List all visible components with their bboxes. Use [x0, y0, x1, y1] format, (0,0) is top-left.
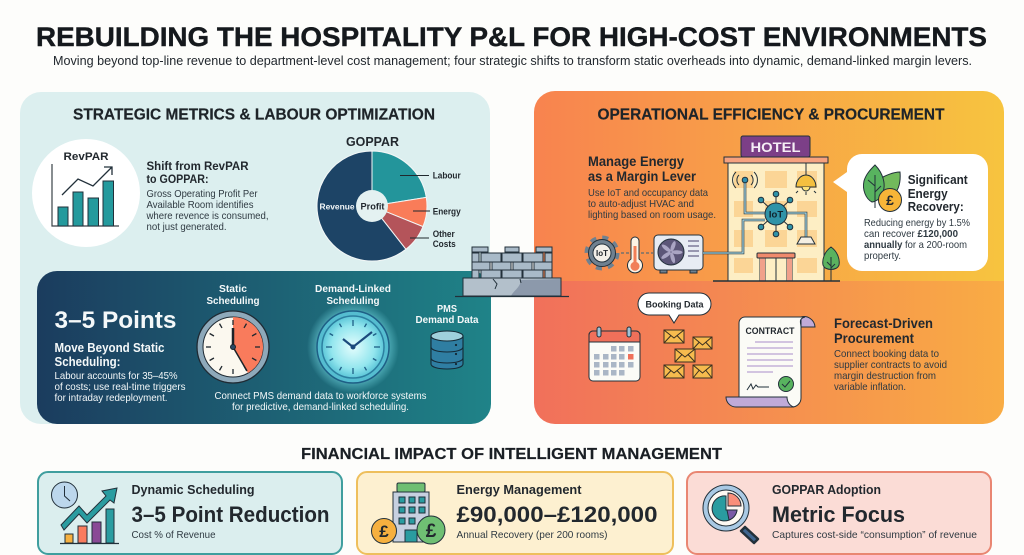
text block: move beyond static scheduling	[54, 341, 186, 404]
panel heading: operational efficiency: OPERATIONAL EFFICIENCY & PROCUREMENT	[598, 106, 945, 124]
text block: manage energy: Manage Energy	[588, 153, 684, 169]
icon: tree	[823, 247, 839, 281]
text block: move beyond static scheduling: Move Beyond Static	[54, 341, 165, 355]
text block: forecast-driven procurement: variable inflation.	[834, 382, 906, 393]
icon: envelopes	[664, 330, 712, 378]
icon: RevPAR bar chart: RevPAR	[64, 151, 109, 163]
label: demand-linked scheduling: Demand-Linked	[315, 283, 391, 295]
chart: GOPPAR pie: Energy	[433, 206, 461, 216]
chart: GOPPAR pie	[317, 134, 461, 261]
callout: significant energy recovery: can recover £120,000	[864, 229, 958, 240]
text block: shift from RevPAR to GOPPAR: to GOPPAR:	[146, 172, 208, 186]
caption: connect PMS data: for predictive, demand-linked scheduling.	[232, 402, 409, 413]
callout: significant energy recovery: Energy	[908, 187, 948, 201]
card: GOPPAR adoption: Metric Focus	[772, 502, 905, 527]
text block: shift from RevPAR to GOPPAR: Available Room identifies	[146, 200, 254, 211]
icon: brick wall	[455, 247, 569, 296]
panel: operational efficiency and procurement	[534, 91, 1004, 424]
icon: RevPAR bar chart	[32, 139, 140, 247]
text block: manage energy: lighting based on room usage.	[588, 210, 716, 221]
icon: contract scroll: CONTRACT	[746, 326, 795, 336]
text block: shift from RevPAR to GOPPAR	[146, 159, 268, 233]
callout: booking data: Booking Data	[646, 300, 704, 310]
text block: forecast-driven procurement: Connect booking data to	[834, 349, 939, 360]
text block: forecast-driven procurement: supplier contracts to avoid	[834, 360, 947, 371]
icon: magnifier with pie	[703, 485, 758, 543]
text block: manage energy: as a Margin Lever	[588, 168, 696, 184]
icon: hotel building with IoT network: HOTEL	[750, 139, 801, 155]
title: REBUILDING THE HOSPITALITY P&L FOR HIGH-COST ENVIRONMENTS	[36, 22, 987, 52]
callout: significant energy recovery: annually for a 200-room	[864, 240, 967, 251]
icon: database	[431, 331, 463, 369]
icon: IoT gear: IoT	[596, 249, 608, 258]
chart: GOPPAR pie: Profit	[360, 202, 385, 212]
text block: forecast-driven procurement: margin destruction from	[834, 371, 936, 382]
card: energy management	[357, 472, 673, 554]
label: demand-linked scheduling	[315, 283, 391, 307]
text block: shift from RevPAR to GOPPAR: not just generated.	[146, 222, 226, 233]
panel heading: strategic metrics: STRATEGIC METRICS & LABOUR OPTIMIZATION	[73, 106, 435, 124]
icon: static clock	[197, 311, 269, 383]
big stat: 3–5 points: 3–5 Points	[54, 307, 176, 334]
icon: clock and rising chart	[52, 482, 119, 544]
label: static scheduling	[206, 283, 260, 307]
icon: wifi sensor	[733, 172, 757, 188]
callout: booking data	[638, 293, 711, 323]
card: GOPPAR adoption	[687, 472, 991, 554]
label: PMS demand data: Demand Data	[416, 314, 479, 326]
card: dynamic scheduling: Cost % of Revenue	[132, 530, 216, 541]
panel: strategic metrics and labour optimization	[20, 92, 491, 424]
icon: IoT wiring	[703, 181, 806, 253]
heading: financial impact: FINANCIAL IMPACT OF INTELLIGENT MANAGEMENT	[301, 446, 723, 463]
icon: calendar	[589, 327, 640, 381]
label: static scheduling: Static	[219, 283, 247, 295]
subtitle: Moving beyond top-line revenue to department-level cost management; four strategic shifts to transform static overheads into dynamic, demand-linked margin levers.	[53, 54, 972, 68]
callout: significant energy recovery	[833, 154, 988, 271]
text block: move beyond static scheduling: of costs; use real-time triggers	[54, 382, 186, 393]
icon: leaves with pound coin: £	[886, 192, 894, 208]
panel: labour scheduling	[37, 271, 491, 424]
text block: manage energy: to auto-adjust HVAC and	[588, 199, 694, 210]
chart: GOPPAR pie: Revenue	[320, 202, 355, 212]
text block: move beyond static scheduling: Scheduling:	[54, 355, 120, 369]
card: energy management: £90,000–£120,000	[456, 502, 658, 527]
icon: ceiling lamp	[796, 163, 816, 195]
caption: connect PMS data	[214, 391, 426, 413]
icon: IoT gear	[587, 238, 653, 268]
card: GOPPAR adoption: GOPPAR Adoption	[772, 482, 881, 497]
text block: manage energy: Use IoT and occupancy data	[588, 188, 708, 199]
text block: move beyond static scheduling: for intraday redeployment.	[54, 393, 168, 404]
icon: building with pound coins: £	[379, 522, 389, 541]
icon: building with pound coins	[372, 483, 445, 544]
card: energy management: Annual Recovery (per 200 rooms)	[456, 530, 608, 541]
card: dynamic scheduling: Dynamic Scheduling	[132, 482, 255, 497]
text block: forecast-driven procurement: Procurement	[834, 330, 914, 346]
text block: forecast-driven procurement	[834, 315, 947, 393]
chart: GOPPAR pie: Labour	[433, 170, 461, 180]
chart: GOPPAR pie: GOPPAR	[346, 134, 400, 149]
text block: forecast-driven procurement: Forecast-Driven	[834, 315, 933, 331]
icon: HVAC unit	[654, 235, 703, 273]
text block: shift from RevPAR to GOPPAR: where revence is consumed,	[146, 211, 268, 222]
text block: manage energy	[588, 153, 716, 221]
card: energy management: Energy Management	[456, 482, 582, 497]
card: GOPPAR adoption: Captures cost-side “consumption” of revenue	[772, 530, 977, 541]
label: PMS demand data: PMS	[437, 303, 457, 315]
icon: smart vent	[797, 237, 815, 244]
callout: significant energy recovery: Reducing energy by 1.5%	[864, 218, 970, 229]
icon: thermometer	[628, 237, 643, 273]
icon: hotel building with IoT network	[703, 136, 840, 281]
icon: glowing demand-linked clock	[307, 301, 399, 393]
callout: significant energy recovery: Recovery:	[908, 200, 964, 214]
callout: significant energy recovery: property.	[864, 251, 901, 262]
text block: shift from RevPAR to GOPPAR: Shift from RevPAR	[146, 159, 249, 173]
icon: contract scroll	[726, 317, 815, 407]
caption: connect PMS data: Connect PMS demand data to workforce systems	[214, 391, 426, 402]
text block: move beyond static scheduling: Labour accounts for 35–45%	[54, 371, 178, 382]
icon: IoT hub: IoT	[769, 210, 783, 220]
label: PMS demand data	[416, 303, 479, 326]
icon: building with pound coins: £	[426, 521, 437, 542]
chart: GOPPAR pie: Costs	[433, 239, 456, 249]
chart: GOPPAR pie: Other	[433, 229, 455, 239]
card: dynamic scheduling	[38, 472, 342, 554]
label: demand-linked scheduling: Scheduling	[326, 295, 380, 307]
label: static scheduling: Scheduling	[206, 295, 260, 307]
icon: IoT hub	[758, 191, 793, 237]
icon: leaves with pound coin	[863, 165, 902, 212]
text block: shift from RevPAR to GOPPAR: Gross Operating Profit Per	[146, 189, 258, 200]
callout: significant energy recovery: Significant	[908, 173, 968, 187]
card: dynamic scheduling: 3–5 Point Reduction	[132, 502, 330, 527]
